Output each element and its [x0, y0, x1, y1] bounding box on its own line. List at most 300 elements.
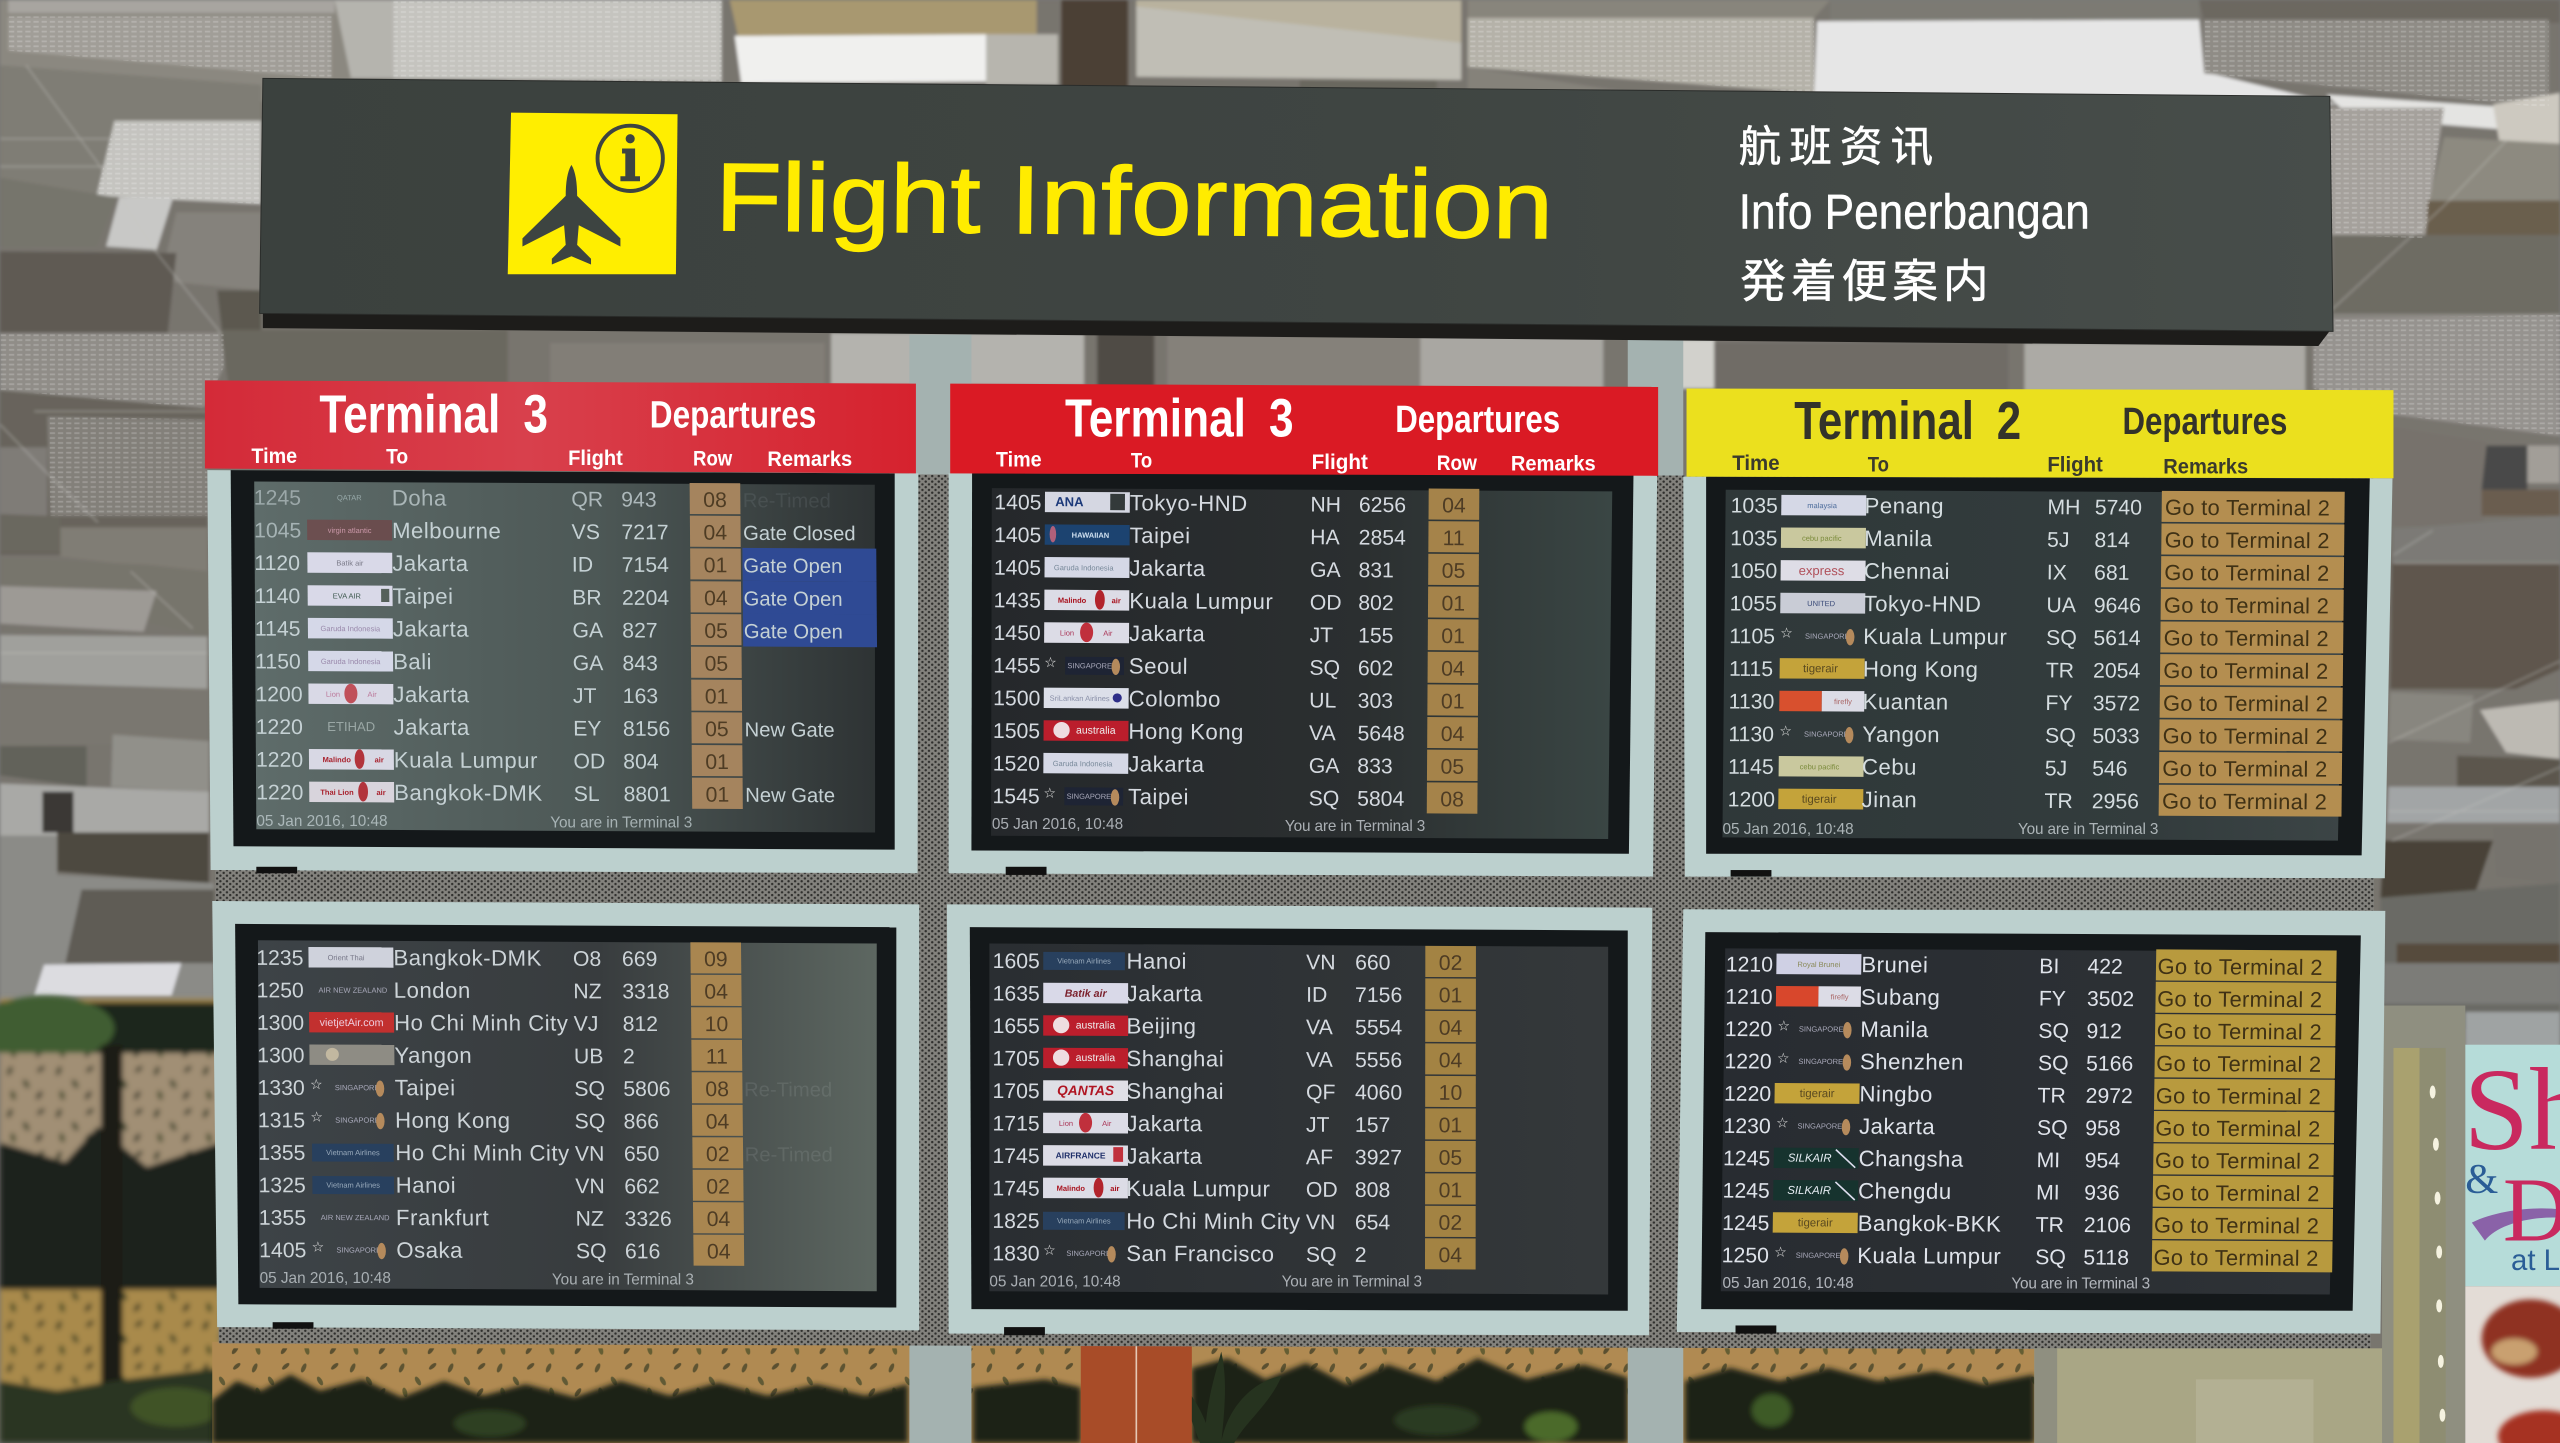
row: 1405 Jakarta [994, 551, 1479, 585]
row: 1300 Ho Chi Minh City: VJ [574, 1013, 599, 1036]
row: 1145 Cebu: 546 [2092, 758, 2128, 781]
flight rows [254, 481, 878, 810]
row: 1220 Manila: Go to Terminal 2 [2157, 1019, 2322, 1045]
header: Terminal 3 Departures: Flight [568, 447, 623, 470]
header: Terminal 3 Departures: Time [251, 445, 297, 468]
row: 1230 Jakarta: SINGAPORE [1798, 1121, 1842, 1131]
header: Terminal 3 Departures: Row [693, 448, 733, 471]
row: 1300 Yangon: 2 [623, 1045, 635, 1068]
row: 1505 Hong Kong: 5648 [1357, 722, 1405, 746]
footer: date and location: 05 Jan 2016, 10:48 [256, 813, 388, 830]
row: 1055 Tokyo-HND: UNITED [1807, 599, 1836, 608]
row: 1405 Osaka: Osaka [396, 1238, 463, 1263]
row: 1050 Chennai: Go to Terminal 2 [2164, 560, 2330, 586]
row: 1245 Bangkok-BKK: tigerair [1798, 1217, 1833, 1229]
row: 1220 Kuala Lumpur: Malindo [323, 755, 351, 764]
row: 1705 Shanghai Qantas: 1705 [993, 1080, 1040, 1103]
row: 1705 Shanghai: Shanghai [1126, 1046, 1224, 1071]
row: 1230 Jakarta [1723, 1108, 2334, 1143]
row: 1830 San Francisco: 04 [1439, 1244, 1462, 1267]
row: 1200 Jakarta: 01 [705, 685, 729, 709]
header: Terminal 3 Departures: Row [1437, 452, 1478, 475]
row: 1035 Penang: malaysia [1807, 501, 1838, 510]
row: 1545 Taipei: SQ [1309, 787, 1339, 811]
row: 1120 Jakarta [254, 545, 877, 582]
row: 1200 Jakarta [255, 677, 742, 711]
flight rows [992, 944, 1476, 1270]
row: 1450 Jakarta: Lion [1060, 628, 1074, 638]
row: 1355 Ho Chi Minh City: VN [575, 1143, 605, 1166]
perforated mounting frame [212, 473, 2377, 1350]
row: 1455 Seoul: 1455 [993, 655, 1041, 678]
row: 1245 Changsha: MI [2036, 1149, 2060, 1172]
row: 1405 Tokyo-HND: ANA [1055, 494, 1084, 509]
row: 1330 Taipei: Taipei [395, 1075, 456, 1100]
row: 1035 Penang: MH [2047, 496, 2081, 519]
header: Terminal 3 Departures [205, 380, 916, 473]
header: Terminal 3 Departures: Flight [1312, 451, 1368, 474]
panel: Terminal 3 departures board 2 [949, 384, 1658, 877]
row: 1825 Ho Chi Minh City: 654 [1355, 1211, 1390, 1234]
row: 1140 Taipei: 1140 [255, 585, 300, 608]
banner: shop and dine advert [2464, 1045, 2560, 1443]
panel: departures board 5 [947, 904, 1652, 1335]
row: 1405 Jakarta: 1405 [994, 557, 1041, 580]
footer: date and location: 05 Jan 2016, 10:48 [1722, 1275, 1854, 1292]
row: 1210 Subang: 1210 [1725, 986, 1773, 1009]
row: 1655 Beijing [993, 1009, 1476, 1042]
row: 1220 Bangkok-DMK: New Gate [745, 785, 835, 807]
row: 1635 Jakarta [993, 977, 1476, 1010]
row: 1035 Manila: Go to Terminal 2 [2165, 527, 2330, 553]
row: 1150 Bali: 1150 [255, 650, 301, 674]
icon: plane and information symbol [508, 113, 678, 274]
row: 1105 Kuala Lumpur: 1105 [1729, 625, 1775, 648]
header: Terminal 2 Departures: To [1868, 454, 1889, 477]
row: 1250 London [256, 973, 742, 1006]
row: 1435 Kuala Lumpur [994, 583, 1479, 618]
row: 1245 Doha: 943 [621, 489, 657, 512]
row: 1150 Bali: 843 [622, 652, 658, 675]
row: 1220 Jakarta Etihad: 05 [705, 718, 729, 741]
footer: date and location [992, 816, 1425, 835]
row: 1500 Colombo: 1500 [993, 687, 1040, 711]
row: 1055 Tokyo-HND: Go to Terminal 2 [2164, 593, 2329, 618]
footer: date and location: You are in Terminal 3 [550, 815, 692, 832]
row: 1250 Kuala Lumpur: ☆ [1775, 1246, 1786, 1259]
row: 1220 Kuala Lumpur: Kuala Lumpur [394, 747, 538, 773]
footer: date and location [1722, 821, 2158, 838]
row: 1120 Jakarta: ID [572, 554, 593, 577]
row: 1405 Tokyo-HND: 1405 [994, 491, 1042, 515]
row: 1145 Jakarta: 05 [704, 620, 728, 643]
row: 1045 Melbourne [254, 514, 856, 548]
row: 1230 Jakarta: 1230 [1723, 1115, 1771, 1138]
row: 1405 Tokyo-HND: 04 [1442, 494, 1466, 518]
row: 1330 Taipei: 1330 [257, 1077, 305, 1100]
row: 1655 Beijing: 04 [1439, 1017, 1463, 1040]
row: 1250 London: 1250 [256, 979, 304, 1002]
row: 1200 Jinan: Jinan [1862, 787, 1917, 812]
row: 1300 Ho Chi Minh City: 1300 [257, 1012, 304, 1035]
row: 1715 Jakarta: Air [1102, 1119, 1112, 1128]
row: 1825 Ho Chi Minh City: Ho Chi Minh City [1126, 1208, 1301, 1234]
row: 1220 Shenzhen: Shenzhen [1860, 1049, 1964, 1075]
row: 1035 Manila: Manila [1864, 526, 1933, 551]
flight rows [256, 941, 834, 1266]
row: 1450 Jakarta [993, 616, 1479, 650]
row: 1045 Melbourne: 04 [703, 522, 727, 545]
row: 1830 San Francisco [992, 1237, 1476, 1270]
row: 1245 Changsha: 1245 [1723, 1147, 1770, 1171]
row: 1245 Changsha: Go to Terminal 2 [2155, 1148, 2320, 1174]
row: 1045 Melbourne: Gate Closed [743, 523, 856, 545]
row: 1505 Hong Kong: australia [1076, 726, 1116, 737]
row: 1220 Shenzhen [1724, 1044, 2335, 1078]
row: 1705 Shanghai Qantas: 10 [1439, 1082, 1462, 1105]
row: 1120 Jakarta: Batik air [336, 558, 364, 568]
row: 1520 Jakarta: 05 [1440, 756, 1464, 779]
row: 1220 Jakarta Etihad: Jakarta [394, 715, 470, 740]
row: 1220 Shenzhen: Go to Terminal 2 [2156, 1051, 2322, 1077]
row: 1245 Doha: 08 [703, 489, 727, 512]
row: 1245 Changsha [1723, 1141, 2334, 1175]
row: 1200 Jakarta: 163 [623, 685, 658, 708]
row: 1210 Subang: 3502 [2087, 988, 2134, 1011]
header: Terminal 3 Departures: Terminal 3 [319, 385, 548, 445]
row: 1405 Tokyo-HND [994, 485, 1479, 520]
banner: shop and dine advert: & [2465, 1156, 2498, 1203]
row: 1520 Jakarta: GA [1309, 755, 1340, 778]
row: 1705 Shanghai Qantas: QF [1306, 1081, 1336, 1104]
row: 1325 Hanoi: 1325 [258, 1174, 306, 1197]
row: 1245 Changsha: 954 [2085, 1149, 2120, 1173]
support pole left [909, 335, 971, 1443]
row: 1315 Hong Kong: Hong Kong [395, 1108, 511, 1133]
banner: shop and dine advert: at L [2511, 1244, 2560, 1277]
row: 1035 Manila [1730, 521, 2344, 555]
row: 1150 Bali: 05 [704, 653, 728, 676]
row: 1500 Colombo: UL [1309, 689, 1337, 713]
row: 1500 Colombo: 303 [1358, 690, 1393, 713]
row: 1150 Bali: GA [573, 652, 604, 675]
row: 1355 Frankfurt: Frankfurt [396, 1205, 489, 1230]
row: 1745 Jakarta Air France: Jakarta [1126, 1143, 1203, 1169]
row: 1220 Bangkok-DMK: 8801 [623, 783, 671, 806]
row: 1245 Chengdu: 1245 [1722, 1180, 1770, 1203]
row: 1325 Hanoi: 02 [706, 1176, 730, 1199]
row: 1330 Taipei [257, 1071, 832, 1104]
row: 1405 Osaka: SINGAPORE [336, 1246, 381, 1255]
row: 1130 Yangon: 5033 [2092, 725, 2140, 748]
row: 1145 Cebu: cebu pacific [1800, 762, 1840, 771]
row: 1035 Penang: Penang [1864, 493, 1944, 519]
row: 1245 Doha: QATAR [337, 493, 362, 502]
row: 1220 Kuala Lumpur: 1220 [256, 749, 303, 772]
row: 1140 Taipei: Taipei [392, 584, 454, 609]
row: 1250 Kuala Lumpur: 1250 [1722, 1244, 1769, 1267]
row: 1355 Ho Chi Minh City: Ho Chi Minh City [395, 1140, 570, 1166]
row: 1200 Jakarta: Jakarta [393, 682, 470, 707]
row: 1220 Kuala Lumpur: 01 [705, 751, 729, 774]
row: 1745 Jakarta Air France: AIRFRANCE [1056, 1150, 1106, 1160]
row: 1825 Ho Chi Minh City [992, 1204, 1476, 1237]
row: 1220 Ningbo: 2972 [2085, 1085, 2133, 1108]
row: 1055 Tokyo-HND: 9646 [2094, 594, 2141, 618]
row: 1715 Jakarta: 01 [1439, 1114, 1462, 1137]
row: 1145 Jakarta: Gate Open [744, 621, 843, 644]
row: 1210 Brunei: 1210 [1726, 953, 1773, 977]
overhead sign: Flight Information [260, 78, 2333, 346]
row: 1405 Jakarta: Jakarta [1129, 556, 1206, 581]
row: 1330 Taipei: 5806 [623, 1078, 671, 1101]
row: 1220 Kuala Lumpur: OD [573, 750, 605, 773]
row: 1220 Jakarta Etihad: New Gate [745, 719, 835, 742]
row: 1220 Shenzhen: ☆ [1777, 1052, 1789, 1065]
footer: date and location: You are in Terminal 3 [1285, 818, 1425, 835]
row: 1455 Seoul: ☆ [1045, 656, 1056, 669]
row: 1245 Bangkok-BKK: Bangkok-BKK [1858, 1211, 2001, 1237]
row: 1405 Jakarta: 831 [1358, 559, 1394, 582]
row: 1245 Doha: Doha [392, 485, 447, 511]
row: 1250 Kuala Lumpur: SQ [2035, 1246, 2066, 1269]
row: 1245 Chengdu: Go to Terminal 2 [2154, 1180, 2320, 1206]
row: 1300 Yangon: 1300 [257, 1044, 305, 1067]
row: 1115 Hong Kong: 1115 [1729, 658, 1773, 681]
row: 1220 Bangkok-DMK: Bangkok-DMK [394, 780, 543, 806]
row: 1220 Jakarta Etihad [256, 710, 835, 744]
row: 1405 Jakarta: Garuda Indonesia [1054, 563, 1114, 573]
row: 1245 Doha: QR [571, 488, 603, 511]
row: 1315 Hong Kong: SQ [575, 1110, 605, 1133]
row: 1115 Hong Kong: TR [2046, 659, 2074, 683]
row: 1745 Kuala Lumpur: 1745 [992, 1177, 1040, 1201]
row: 1220 Kuala Lumpur: air [375, 755, 384, 764]
row: 1605 Hanoi: 660 [1355, 951, 1391, 975]
row: 1230 Jakarta: Go to Terminal 2 [2155, 1116, 2321, 1142]
heading: Flight Information: Flight Information [715, 144, 1553, 259]
row: 1245 Bangkok-BKK: Go to Terminal 2 [2154, 1212, 2319, 1238]
row: 1105 Kuala Lumpur: Kuala Lumpur [1863, 624, 2008, 650]
row: 1330 Taipei: Re-Timed [744, 1079, 832, 1101]
row: 1545 Taipei: Taipei [1128, 784, 1189, 809]
row: 1250 London: AIR NEW ZEALAND [318, 986, 388, 995]
row: 1220 Shenzhen: 1220 [1724, 1050, 1772, 1074]
row: 1220 Manila: 1220 [1725, 1018, 1772, 1041]
row: 1250 London: London [394, 978, 471, 1003]
support pole right [1628, 335, 1683, 1443]
row: 1435 Kuala Lumpur: air [1112, 596, 1121, 605]
row: 1355 Ho Chi Minh City: 1355 [258, 1142, 306, 1165]
row: 1705 Shanghai Qantas [993, 1074, 1476, 1107]
row: 1220 Bangkok-DMK: 01 [706, 784, 729, 807]
row: 1200 Jinan: Go to Terminal 2 [2162, 789, 2327, 814]
row: 1330 Taipei: SINGAPORE [335, 1083, 379, 1092]
row: 1035 Manila: 5J [2047, 529, 2070, 552]
row: 1245 Chengdu: SILKAIR [1787, 1185, 1831, 1197]
orange pillar [1081, 1342, 1192, 1443]
row: 1435 Kuala Lumpur: 01 [1441, 592, 1465, 616]
row: 1150 Bali [255, 645, 742, 678]
row: 1505 Hong Kong: Hong Kong [1128, 719, 1244, 745]
row: 1120 Jakarta: 1120 [254, 552, 300, 575]
row: 1245 Chengdu [1722, 1173, 2333, 1208]
row: 1105 Kuala Lumpur: SQ [2046, 627, 2077, 650]
row: 1045 Melbourne: 7217 [621, 521, 669, 544]
row: 1520 Jakarta: Garuda Indonesia [1053, 759, 1113, 768]
row: 1715 Jakarta: 157 [1355, 1114, 1390, 1137]
row: 1300 Yangon: Yangon [394, 1043, 472, 1068]
header: Terminal 3 Departures: Departures [1395, 398, 1560, 440]
row: 1210 Brunei: Go to Terminal 2 [2157, 954, 2323, 980]
row: 1105 Kuala Lumpur [1729, 619, 2343, 653]
row: 1145 Jakarta: Jakarta [393, 616, 469, 642]
row: 1705 Shanghai [993, 1042, 1476, 1075]
row: 1115 Hong Kong: 2054 [2093, 660, 2141, 683]
header: Terminal 2 Departures: Flight [2047, 454, 2103, 477]
row: 1405 Taipei: HAWAIIAN [1072, 531, 1109, 540]
row: 1220 Ningbo: TR [2037, 1084, 2066, 1108]
row: 1130 Kuantan [1729, 685, 2343, 719]
row: 1435 Kuala Lumpur: 1435 [994, 589, 1041, 613]
footer: date and location: 05 Jan 2016, 10:48 [1722, 821, 1854, 838]
row: 1220 Bangkok-DMK: air [376, 788, 386, 797]
row: 1130 Yangon [1728, 717, 2342, 751]
footer: date and location [260, 1270, 694, 1289]
row: 1055 Tokyo-HND: 1055 [1730, 593, 1777, 616]
row: 1220 Ningbo: Go to Terminal 2 [2156, 1083, 2321, 1109]
row: 1050 Chennai: Chennai [1864, 559, 1950, 584]
row: 1235 Bangkok-DMK: 1235 [256, 947, 304, 970]
row: 1745 Kuala Lumpur: air [1110, 1184, 1120, 1193]
row: 1450 Jakarta: 1450 [993, 622, 1041, 645]
row: 1035 Manila: 814 [2094, 529, 2130, 552]
row: 1355 Frankfurt [259, 1201, 744, 1233]
row: 1115 Hong Kong: Hong Kong [1863, 656, 1979, 682]
bezel sensor [1736, 1325, 1776, 1334]
row: 1405 Taipei: 1405 [994, 524, 1041, 547]
row: 1050 Chennai: 1050 [1730, 560, 1777, 583]
panel: departures board 4 [212, 901, 919, 1330]
row: 1050 Chennai [1730, 554, 2344, 588]
row: 1130 Kuantan: firefly [1834, 697, 1852, 706]
row: 1450 Jakarta: Jakarta [1129, 621, 1205, 646]
row: 1635 Jakarta: ID [1306, 984, 1327, 1007]
row: 1245 Chengdu: 936 [2084, 1182, 2120, 1205]
row: 1115 Hong Kong [1729, 652, 2343, 686]
row: 1105 Kuala Lumpur: ☆ [1781, 627, 1792, 640]
row: 1145 Jakarta [255, 611, 877, 647]
row: 1655 Beijing: 1655 [993, 1015, 1040, 1038]
row: 1455 Seoul [993, 649, 1478, 683]
row: 1455 Seoul: SQ [1309, 657, 1340, 680]
row: 1450 Jakarta: 155 [1358, 624, 1394, 648]
row: 1505 Hong Kong [993, 714, 1478, 748]
row: 1705 Shanghai: 04 [1439, 1049, 1463, 1072]
row: 1210 Subang: Subang [1861, 984, 1940, 1010]
row: 1210 Subang [1725, 979, 2336, 1014]
row: 1050 Chennai: IX [2047, 561, 2067, 585]
row: 1035 Penang [1731, 489, 2345, 523]
row: 1605 Hanoi: Hanoi [1127, 949, 1187, 974]
row: 1245 Changsha: Changsha [1858, 1146, 1964, 1172]
row: 1325 Hanoi: Hanoi [396, 1173, 456, 1198]
row: 1355 Ho Chi Minh City: 02 [706, 1143, 730, 1166]
row: 1220 Manila: ☆ [1778, 1020, 1790, 1033]
row: 1200 Jinan [1728, 783, 2342, 817]
row: 1330 Taipei: SQ [574, 1078, 605, 1101]
row: 1035 Penang: Go to Terminal 2 [2165, 495, 2330, 521]
row: 1655 Beijing: australia [1076, 1020, 1115, 1032]
row: 1210 Brunei: BI [2039, 955, 2059, 978]
row: 1715 Jakarta [992, 1107, 1476, 1140]
row: 1455 Seoul: 04 [1441, 658, 1465, 681]
row: 1455 Seoul: Seoul [1129, 653, 1188, 679]
row: 1405 Tokyo-HND: 6256 [1359, 494, 1406, 517]
row: 1500 Colombo: SriLankan Airlines [1050, 694, 1110, 703]
row: 1245 Bangkok-BKK: 2106 [2084, 1214, 2131, 1237]
row: 1220 Bangkok-DMK: 1220 [256, 781, 303, 805]
header: Terminal 3 Departures [950, 384, 1658, 476]
header: Terminal 2 Departures: Remarks [2163, 455, 2248, 478]
row: 1210 Brunei: Royal Brunei [1797, 960, 1841, 969]
row: 1605 Hanoi: 02 [1439, 952, 1462, 975]
row: 1705 Shanghai: 1705 [993, 1047, 1040, 1071]
row: 1830 San Francisco: SINGAPORE [1066, 1249, 1111, 1258]
header: Terminal 3 Departures: To [1131, 450, 1152, 473]
row: 1145 Jakarta: Garuda Indonesia [321, 624, 381, 633]
row: 1245 Bangkok-BKK [1722, 1205, 2333, 1240]
row: 1355 Frankfurt: AIR NEW ZEALAND [321, 1213, 390, 1222]
row: 1035 Penang: 1035 [1731, 495, 1778, 518]
row: 1300 Ho Chi Minh City: Ho Chi Minh City [394, 1010, 569, 1036]
header: Terminal 3 Departures: Terminal 3 [1065, 388, 1294, 448]
header: Terminal 2 Departures [1687, 388, 2393, 478]
row: 1505 Hong Kong: 1505 [993, 720, 1040, 743]
row: 1130 Yangon: SINGAPORE [1804, 730, 1849, 739]
header: Terminal 2 Departures: Terminal 2 [1794, 391, 2021, 451]
row: 1230 Jakarta: Jakarta [1859, 1114, 1936, 1139]
header: Terminal 3 Departures: Remarks [1511, 452, 1596, 475]
row: 1140 Taipei: 2204 [622, 587, 669, 610]
row: 1220 Kuala Lumpur [256, 743, 743, 776]
row: 1655 Beijing: VA [1306, 1016, 1334, 1039]
row: 1220 Jakarta Etihad: EY [573, 717, 602, 741]
row: 1220 Jakarta Etihad: 1220 [256, 716, 303, 739]
row: 1245 Bangkok-BKK: 1245 [1722, 1212, 1770, 1235]
row: 1245 Doha: Re-Timed [743, 490, 831, 513]
row: 1705 Shanghai: VA [1306, 1049, 1334, 1072]
flight rows [992, 485, 1479, 814]
footer: date and location: You are in Terminal 3 [2018, 821, 2158, 838]
row: 1220 Shenzhen: SINGAPORE [1798, 1057, 1843, 1066]
row: 1220 Ningbo: 1220 [1724, 1083, 1771, 1106]
row: 1355 Ho Chi Minh City: Re-Timed [745, 1144, 833, 1166]
row: 1250 London: 3318 [622, 980, 670, 1004]
row: 1830 San Francisco: San Francisco [1126, 1241, 1274, 1267]
row: 1705 Shanghai: 5556 [1355, 1049, 1402, 1072]
row: 1450 Jakarta: Air [1103, 629, 1113, 638]
background: plant wall centre [212, 1342, 2038, 1443]
header: Terminal 2 Departures: Departures [2122, 400, 2287, 442]
row: 1405 Taipei: 2854 [1359, 526, 1406, 550]
row: 1130 Kuantan: Kuantan [1862, 689, 1949, 715]
row: 1220 Manila: SINGAPORE [1799, 1025, 1844, 1034]
row: 1300 Ho Chi Minh City: 812 [623, 1013, 658, 1036]
row: 1220 Manila: SQ [2038, 1020, 2069, 1043]
row: 1455 Seoul: 602 [1358, 657, 1393, 680]
row: 1500 Colombo: 01 [1441, 690, 1465, 713]
